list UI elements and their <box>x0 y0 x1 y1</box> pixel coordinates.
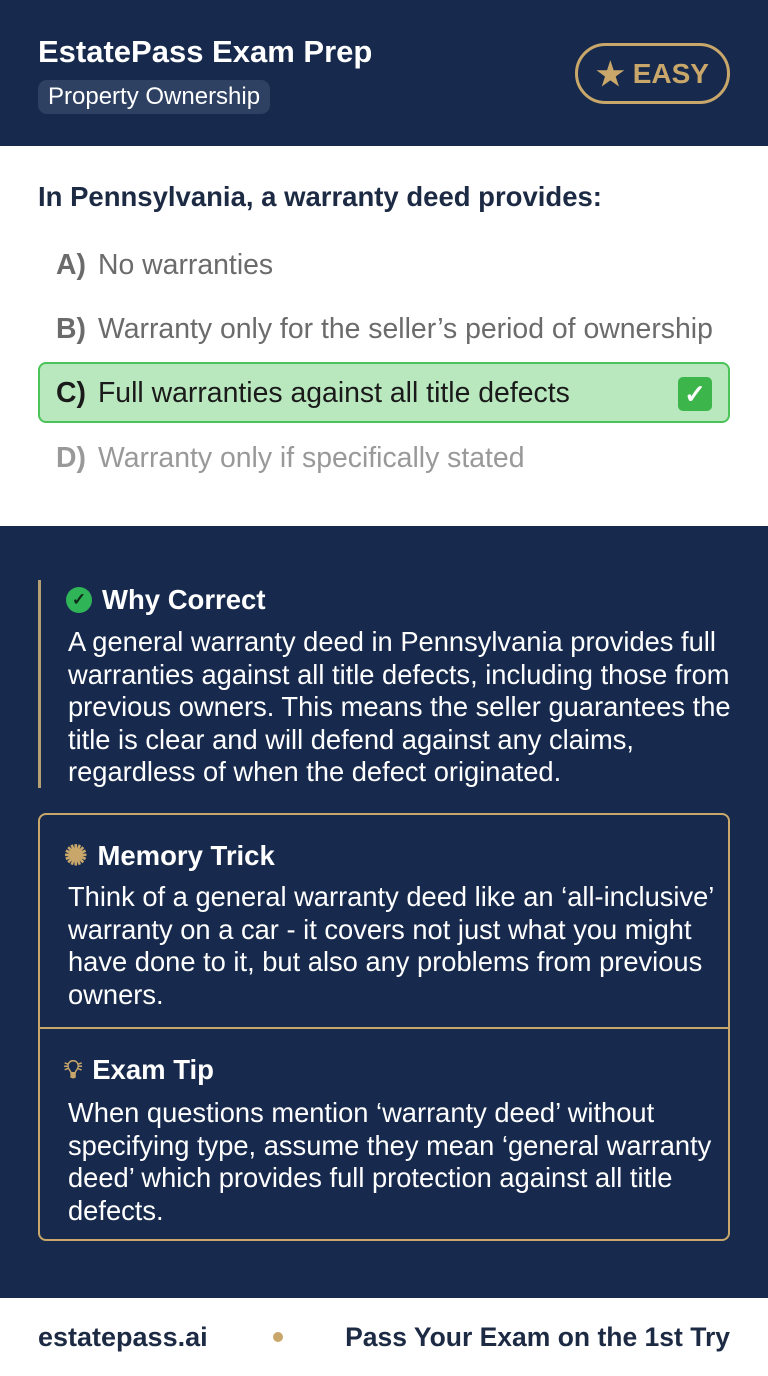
why correct <box>38 580 738 788</box>
exam tip text: specifying type, assume they mean ‘general warranty <box>68 1130 711 1161</box>
exam tip text <box>68 1097 712 1226</box>
heading: ✓ <box>72 590 86 609</box>
memory text: Think of a general warranty deed like an ‘all-inclusive’ <box>68 881 714 912</box>
heading: Why Correct <box>102 584 266 615</box>
memory text: owners. <box>68 979 164 1010</box>
exam tip text: defects. <box>68 1195 164 1226</box>
memory text: have done to it, but also any problems from previous <box>68 946 702 977</box>
option A: A) No warranties <box>56 249 273 281</box>
question panel <box>0 146 768 526</box>
exam tip heading: 💡︎ <box>64 1054 82 1084</box>
header <box>0 0 768 146</box>
exam tip heading: Exam Tip <box>92 1054 214 1085</box>
site: estatepass.ai <box>38 1322 208 1352</box>
difficulty badge: EASY <box>633 58 709 88</box>
question: In Pennsylvania, a warranty deed provides: <box>38 181 602 212</box>
option D: D) Warranty only if specifically stated <box>56 442 525 474</box>
option B: B) Warranty only for the seller’s period of ownership <box>56 313 713 345</box>
difficulty badge <box>575 43 730 104</box>
category tag: Property Ownership <box>48 83 260 110</box>
memory trick heading: ✺ <box>64 840 87 871</box>
icon: check <box>678 377 712 411</box>
icon: check: ✓ <box>684 379 706 409</box>
memory trick heading: Memory Trick <box>97 840 275 870</box>
text: title is clear and will defend against any claims, <box>68 724 634 755</box>
footer <box>0 1298 768 1376</box>
tips box <box>38 813 730 1241</box>
tagline: Pass Your Exam on the 1st Try <box>345 1322 730 1352</box>
difficulty badge: ★ <box>596 56 625 92</box>
text <box>68 626 731 787</box>
option C correct <box>38 362 730 423</box>
memory text <box>68 881 714 1010</box>
text: previous owners. This means the seller guarantees the <box>68 691 731 722</box>
memory text: warranty on a car - it covers not just what you might <box>68 914 692 945</box>
option C correct: C) Full warranties against all title defects <box>56 377 570 409</box>
exam tip text: When questions mention ‘warranty deed’ without <box>68 1097 654 1128</box>
text: warranties against all title defects, including those from <box>68 659 730 690</box>
exam tip text: deed’ which provides full protection against all title <box>68 1162 672 1193</box>
text: regardless of when the defect originated. <box>68 756 561 787</box>
text: A general warranty deed in Pennsylvania provides full <box>68 626 716 657</box>
title: EstatePass Exam Prep <box>38 34 372 69</box>
